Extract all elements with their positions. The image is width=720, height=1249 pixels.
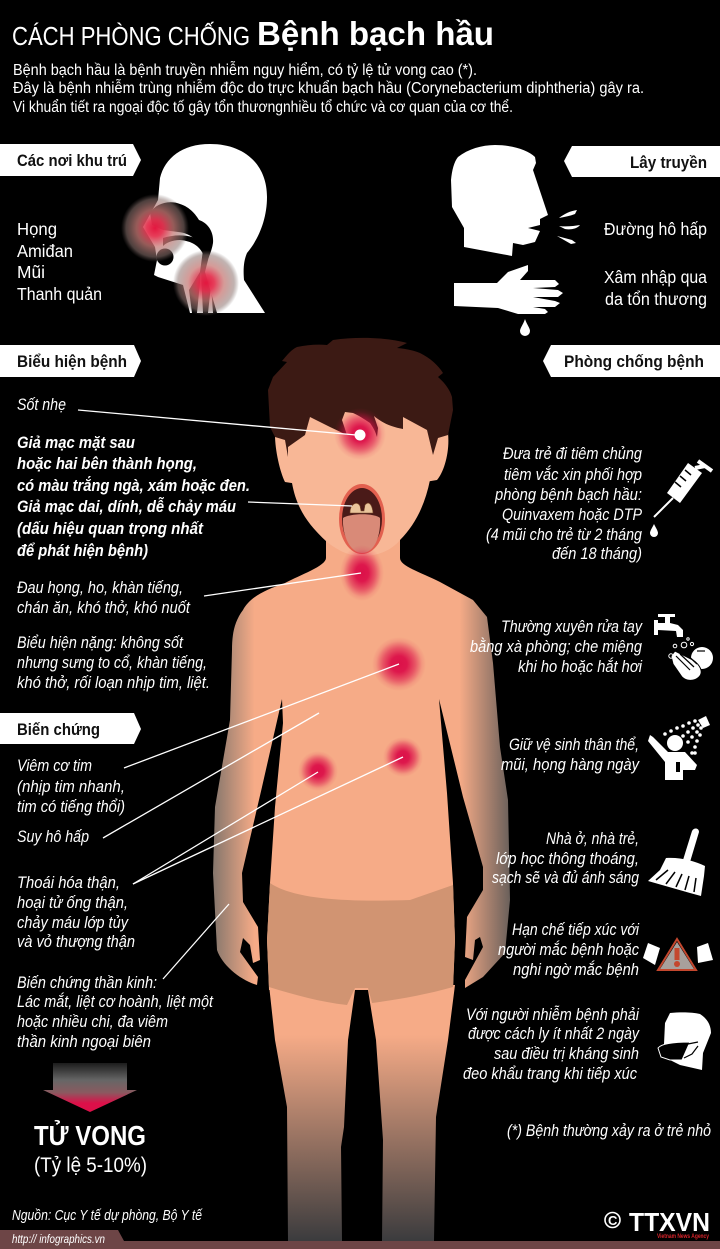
icon: syringe [650, 461, 712, 537]
text: complications: và vỏ thượng thận [17, 933, 135, 951]
arrow: down to death [43, 1063, 137, 1112]
icon: head with mask [658, 1012, 711, 1070]
text: vaccination: Quinvaxem hoặc DTP [502, 506, 642, 524]
text: symptoms: nhưng sưng to cổ, khàn tiếng, [17, 654, 207, 672]
logo: TTXVN [605, 1207, 710, 1240]
text: complications: Lác mắt, liệt cơ hoành, liệt một [17, 992, 214, 1011]
banner: Các nơi khu trú [0, 144, 141, 176]
text: hand washing: Thường xuyên rửa tay [501, 618, 644, 636]
intro text: Đây là bệnh nhiễm trùng nhiễm độc do trực khuẩn bạch hầu (Corynebacterium diphtheria) gây ra. [13, 80, 644, 97]
icon: hand with drop [454, 265, 563, 336]
text: key symptom bold: có màu trắng ngà, xám hoặc đen. [17, 476, 250, 495]
text: hygiene: Giữ vệ sinh thân thể, [509, 736, 639, 754]
text: complications [17, 757, 214, 1051]
icon: coughing man [451, 145, 580, 256]
text: transmission routes: da tổn thương [605, 289, 707, 309]
text: symptoms: chán ăn, khó thở, khó nuốt [17, 599, 191, 617]
intro text [13, 62, 644, 116]
list: locations [17, 219, 102, 304]
icon: broom [648, 828, 705, 896]
text: death rate: (Tỷ lệ 5-10%) [34, 1154, 147, 1177]
heart glow [372, 637, 426, 691]
icon: handshake warning [643, 939, 713, 970]
intro text: Bệnh bạch hầu là bệnh truyền nhiễm nguy hiểm, có tỷ lệ tử vong cao (*). [13, 62, 477, 79]
forehead fever glow [334, 408, 386, 460]
banner: Biểu hiện bệnh [0, 345, 141, 377]
text: key symptom bold: để phát hiện bệnh) [17, 542, 148, 560]
text: complications: chảy máu lớp tủy [17, 914, 130, 932]
text: hand washing: bằng xà phòng; che miệng [470, 637, 643, 656]
legs [269, 985, 455, 1241]
banner: Phòng chống bệnh [543, 345, 720, 377]
text: limit contact: người mắc bệnh hoặc [498, 940, 640, 959]
text: complications: hoặc nhiều chi, đa viêm [17, 1013, 168, 1031]
text: limit contact: Hạn chế tiếp xúc với [512, 921, 640, 939]
text: vaccination: Đưa trẻ đi tiêm chủng [503, 445, 643, 463]
icon: shower [648, 716, 710, 780]
banner: Các nơi khu trú: Các nơi khu trú [17, 152, 127, 170]
text: death rate: TỬ VONG [34, 1119, 146, 1151]
text: isolation: sau điều trị kháng sinh [494, 1045, 639, 1063]
list: locations: Họng [17, 219, 57, 239]
text: key symptom bold: hoặc hai bên thành họng, [17, 455, 197, 473]
text: hygiene: mũi, họng hàng ngày [501, 756, 641, 774]
title: CÁCH PHÒNG CHỐNG [12, 21, 250, 51]
text: isolation: đeo khẩu trang khi tiếp xúc [463, 1065, 638, 1083]
hair [268, 338, 453, 457]
mouth [339, 484, 385, 554]
logo: TTXVN: C [608, 1213, 618, 1228]
source: Nguồn: Cục Y tế dự phòng, Bộ Y tế [12, 1208, 203, 1224]
logo: TTXVN: TTXVN [629, 1207, 710, 1237]
icon: head cross-section [121, 144, 267, 316]
text: hand washing [470, 618, 644, 676]
text: complications: Viêm cơ tim [17, 757, 92, 775]
text: complications: (nhịp tim nhanh, [17, 778, 125, 796]
text: complications: hoại tử ống thận, [17, 894, 128, 912]
banner: Lây truyền: Lây truyền [630, 154, 707, 172]
text: vaccination: tiêm vắc xin phối hợp [504, 465, 642, 484]
banner: Lây truyền [564, 146, 720, 177]
text: complications: tim có tiếng thổi) [17, 798, 125, 816]
kidney glow right [383, 737, 423, 777]
torso and arms [213, 535, 510, 990]
icon: tap and soapy hands [654, 614, 713, 680]
leader lines [78, 410, 403, 979]
text: limit contact [498, 921, 640, 979]
text: complications: Thoái hóa thận, [17, 874, 120, 892]
text: vaccination: phòng bệnh bạch hầu: [494, 486, 642, 504]
text: transmission routes: Đường hô hấp [604, 219, 707, 239]
text: limit contact: nghi ngờ mắc bệnh [513, 960, 639, 979]
text: key symptom bold: Giả mạc dai, dính, dễ chảy máu [17, 496, 236, 516]
banner: Biến chứng: Biến chứng [17, 721, 100, 739]
list: locations: Thanh quản [17, 284, 102, 304]
text: transmission routes [604, 219, 707, 309]
text: key symptom bold: Giả mạc mặt sau [17, 434, 135, 452]
text: death rate [34, 1119, 147, 1177]
banner: Phòng chống bệnh: Phòng chống bệnh [564, 353, 704, 371]
text: vaccination: đến 18 tháng) [552, 545, 642, 563]
text: isolation: được cách ly ít nhất 2 ngày [468, 1025, 641, 1043]
list: locations: Amiđan [17, 241, 73, 261]
text: hand washing: khi ho hoặc hắt hơi [518, 657, 643, 676]
title [12, 15, 494, 52]
list: locations: Mũi [17, 262, 45, 282]
banner: Biểu hiện bệnh: Biểu hiện bệnh [17, 353, 127, 371]
text: symptoms: Sốt nhẹ [17, 396, 66, 414]
footer bar: http:// infographics.vn [12, 1232, 105, 1246]
title: Bệnh bạch hầu [257, 15, 494, 52]
text: key symptom bold: (dấu hiệu quan trọng nhất [17, 520, 204, 538]
text: vaccination: (4 mũi cho trẻ từ 2 tháng [486, 526, 643, 544]
text: vaccination [486, 445, 643, 563]
text: ventilation [492, 830, 640, 887]
footer bar [0, 1230, 720, 1249]
face [286, 395, 433, 556]
figure: child body [213, 338, 510, 1241]
kidney glow left [298, 751, 338, 791]
text: symptoms: khó thở, rối loạn nhịp tim, liệt. [17, 674, 210, 692]
text: isolation [463, 1005, 641, 1083]
logo: TTXVN: Vietnam News Agency [657, 1234, 710, 1240]
text: complications: thần kinh ngoại biên [17, 1033, 151, 1051]
text: ventilation: lớp học thông thoáng, [496, 850, 639, 868]
text: ventilation: Nhà ở, nhà trẻ, [546, 830, 639, 848]
text: hygiene [501, 736, 641, 774]
text: key symptom bold [17, 434, 250, 560]
banner: Biến chứng [0, 713, 141, 744]
text: complications: Suy hô hấp [17, 828, 89, 846]
fever marker dot [354, 430, 366, 440]
text: symptoms: Biểu hiện nặng: không sốt [17, 634, 184, 652]
text: isolation: Với người nhiễm bệnh phải [466, 1005, 640, 1024]
neck glow [340, 545, 384, 601]
text: complications: Biến chứng thần kinh: [17, 974, 157, 992]
text: symptoms [17, 396, 250, 692]
text: ventilation: sạch sẽ và đủ ánh sáng [492, 869, 640, 887]
ears [275, 430, 448, 484]
text: symptoms: Đau họng, ho, khàn tiếng, [17, 579, 183, 597]
intro text: Vi khuẩn tiết ra ngoại độc tố gây tổn thươngnhiều tổ chức và cơ quan của cơ thể. [13, 99, 513, 116]
underwear [267, 883, 455, 1005]
text: transmission routes: Xâm nhập qua [604, 267, 707, 287]
